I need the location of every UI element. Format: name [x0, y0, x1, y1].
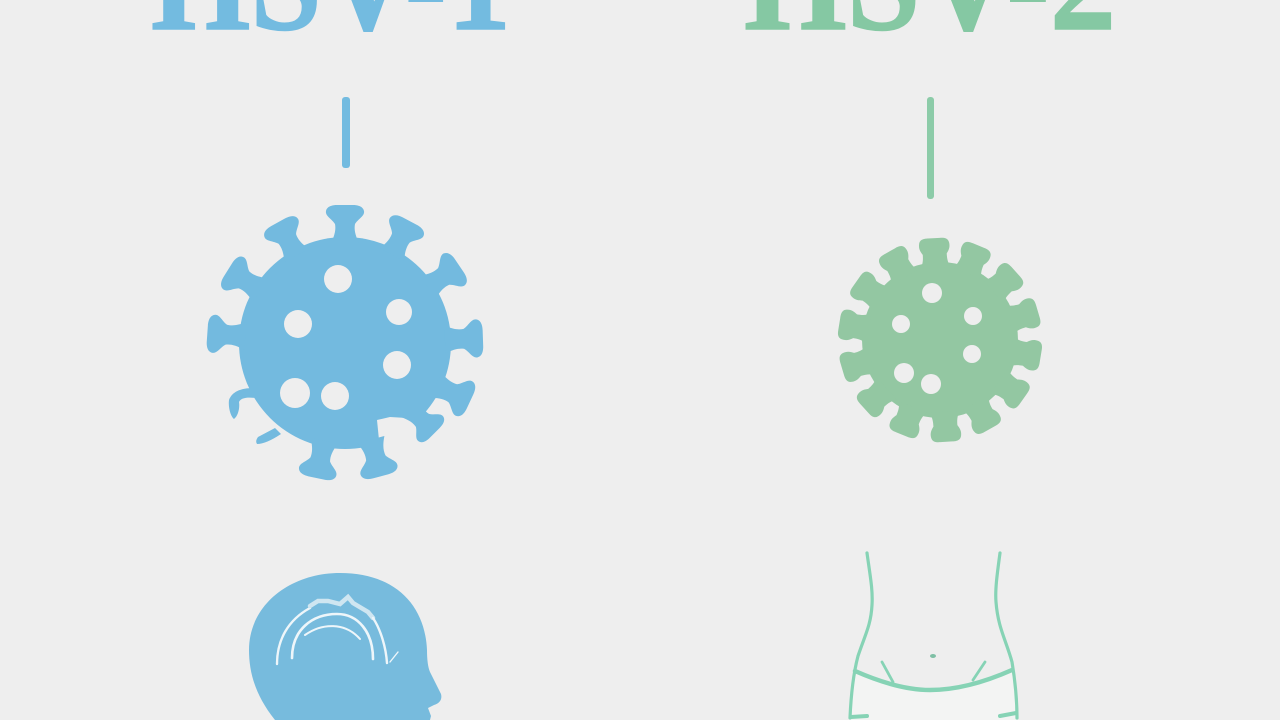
icon: HSV-2 virus	[837, 237, 1043, 443]
connector: HSV-1 line	[342, 97, 350, 168]
connector: HSV-2 line	[927, 97, 934, 199]
icon: head with brain	[249, 573, 441, 720]
icon: lower torso	[850, 553, 1017, 720]
icon: HSV-1 virus	[206, 205, 484, 482]
